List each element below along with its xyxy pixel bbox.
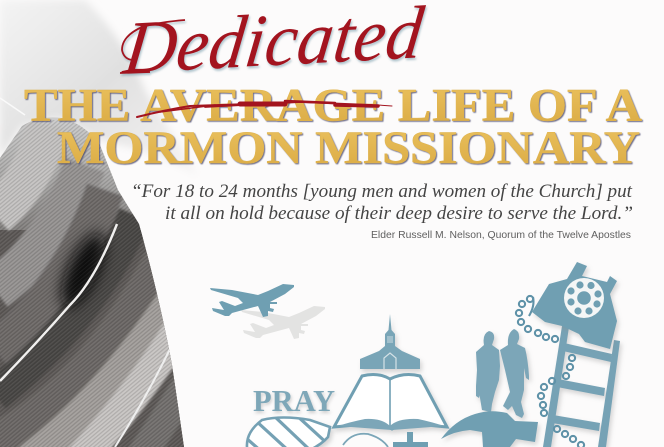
icon: airplane shadow <box>241 306 325 339</box>
icon: striped tie shape <box>245 414 330 447</box>
rotary dial <box>564 278 604 318</box>
icon: open book <box>334 375 447 430</box>
attribution: Elder Russell M. Nelson, Quorum of the Twelve Apostles <box>371 229 631 241</box>
icon: church <box>360 314 420 369</box>
icon: rotary telephone <box>532 262 617 349</box>
icon: airplane <box>210 284 294 317</box>
title: the average life of a mormon missionary: THE AVERAGE LIFE OF A <box>24 80 642 132</box>
title: the average life of a mormon missionary: MORMON MISSIONARY <box>57 122 640 174</box>
tie knot <box>0 0 198 176</box>
icon: coiled telephone cord <box>516 296 584 447</box>
title: the average life of a mormon missionary <box>24 80 642 174</box>
word: pray: PRAY <box>253 383 335 418</box>
quote: “For 18 to 24 months [young men and women of the Church] put <box>131 182 633 202</box>
red strikethrough <box>137 101 392 117</box>
necktie <box>0 0 198 447</box>
icon: hammer <box>441 411 538 447</box>
icon: ladder <box>543 326 620 447</box>
icon: two missionaries <box>476 329 529 418</box>
quote: it all on hold because of their deep desire to serve the Lord.” <box>165 204 633 224</box>
icon: cross and flourish <box>343 432 428 447</box>
quote <box>131 182 633 224</box>
